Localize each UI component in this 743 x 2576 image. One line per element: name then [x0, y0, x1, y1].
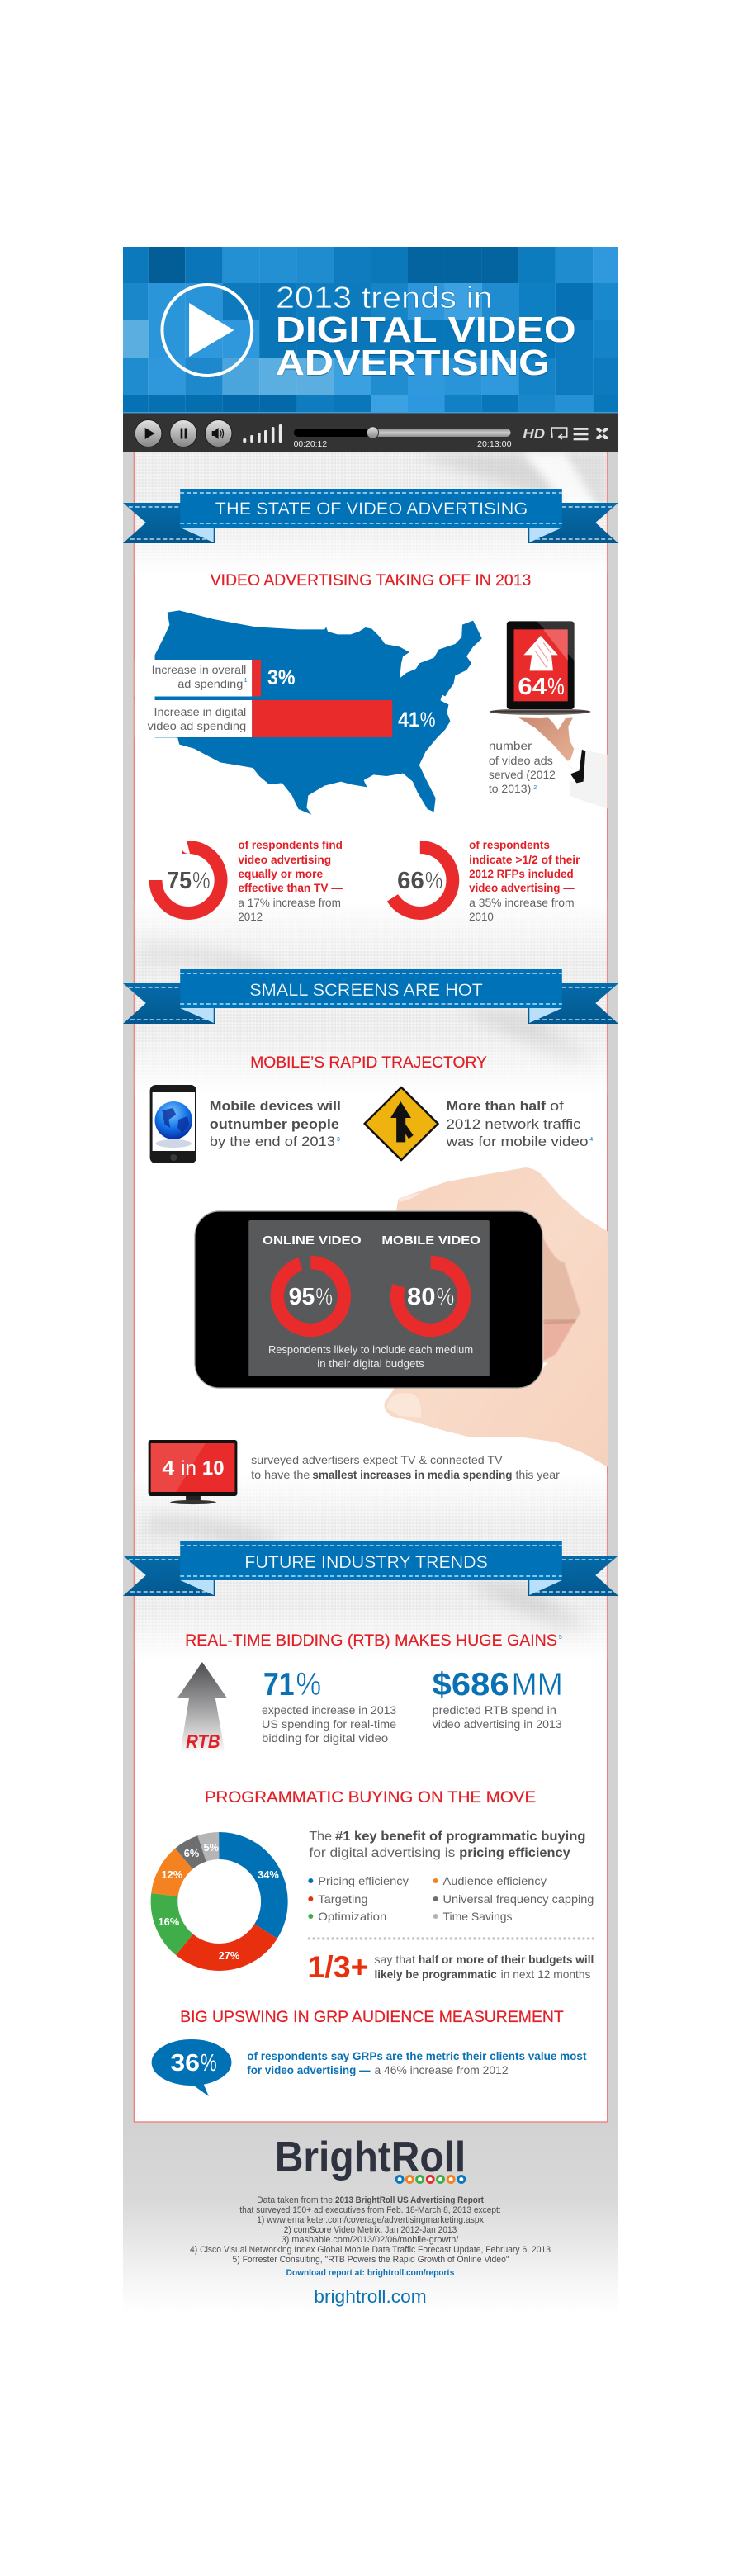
text: sources: 5) Forrester Consulting, "RTB Powers the Rapid Growth of Online Video" — [232, 2255, 509, 2265]
donut: 75 percent: % — [192, 868, 211, 894]
section ribbon: small screens are hot: SMALL SCREENS ARE HOT — [249, 981, 483, 1000]
text: sources — [190, 2195, 551, 2265]
text: number of video ads: served (2012 — [489, 768, 556, 781]
bar: overall ad spending: 1 — [244, 678, 248, 684]
heading: programmatic buying: PROGRAMMATIC BUYING ON THE MOVE — [205, 1789, 536, 1807]
section ribbon: future industry trends: FUTURE INDUSTRY TRENDS — [244, 1553, 488, 1572]
HD label: HD — [523, 425, 545, 442]
tablet value: % — [547, 674, 565, 700]
icon: tray and tablet — [490, 621, 590, 715]
icon: play circle — [162, 285, 252, 376]
title: ADVERTISING — [276, 343, 550, 383]
text: tv spending — [251, 1453, 560, 1481]
caption: Respondents likely to include each medium — [268, 1344, 473, 1356]
bar: overall ad spending — [135, 660, 296, 697]
legend: Pricing efficiency — [318, 1875, 409, 1887]
stat: 686 million: MM — [512, 1667, 563, 1702]
bar: digital video ad spending: 41 — [398, 709, 419, 732]
bar: digital video ad spending — [135, 700, 436, 737]
link: brightroll.com: brightroll.com — [314, 2286, 427, 2307]
speech bubble: 36 percent: % — [201, 2050, 217, 2076]
text: 75 percent description: of respondents find — [238, 838, 343, 851]
text: sources: 2013 BrightRoll US Advertising Report — [335, 2195, 484, 2205]
phone body — [195, 1211, 542, 1388]
text: number of video ads: to 2013) — [489, 782, 531, 795]
time labels: 00:20:12 — [294, 440, 327, 449]
stat: one third plus: in next 12 months — [501, 1968, 590, 1981]
section ribbon: the state of video advertising — [123, 489, 618, 543]
panel: white content card — [134, 452, 608, 2122]
donut: 95 percent: 95 — [289, 1284, 315, 1310]
stat: one third plus: half or more of their budgets will — [419, 1953, 594, 1966]
map: United States — [155, 610, 482, 815]
hero banner — [123, 247, 618, 413]
text: sources: Data taken from the — [257, 2195, 333, 2205]
donut: 80 percent: % — [437, 1284, 454, 1310]
icon: tv with 4 in 10: 10 — [202, 1457, 225, 1480]
text: GRPs: a 46% increase from 2012 — [374, 2063, 509, 2076]
heading: video advertising taking off: VIDEO ADVERTISING TAKING OFF IN 2013 — [211, 572, 531, 590]
text: network traffic: of — [550, 1098, 564, 1114]
donut: 75 percent — [156, 847, 221, 913]
text: 75 percent description: effective than TV — — [238, 881, 343, 894]
text: GRPs: of respondents say GRPs are the metric their clients value most — [247, 2049, 587, 2062]
background: cloth texture lower — [135, 1474, 607, 1660]
text: tv spending: smallest increases in media spending — [312, 1468, 513, 1481]
caption: in their digital budgets — [317, 1358, 424, 1370]
text: mobile devices: 3 — [337, 1137, 340, 1143]
background: cloth texture top — [135, 452, 607, 574]
donut: 80 percent: 80 — [407, 1284, 436, 1310]
donut chart: programmatic benefits: 12% — [161, 1868, 183, 1881]
phone screen — [248, 1220, 490, 1376]
speech bubble: 36 percent — [152, 2039, 231, 2096]
text: key benefit — [309, 1830, 585, 1860]
label: mobile video: MOBILE VIDEO — [381, 1234, 480, 1248]
text: key benefit: for digital advertising is — [309, 1846, 455, 1860]
icon: RTB arrow: RTB — [186, 1731, 220, 1752]
icon: hand — [384, 1167, 608, 1467]
text: key benefit: #1 key benefit of programmatic buying — [335, 1830, 585, 1844]
stat: 71 percent: bidding for digital video — [262, 1731, 389, 1745]
donut chart: programmatic benefits: 16% — [159, 1915, 180, 1928]
text: network traffic: 4 — [589, 1137, 593, 1143]
stat: 71 percent: US spending for real-time — [262, 1717, 396, 1731]
text: sources: 3) mashable.com/2013/02/06/mobile-growth/ — [282, 2235, 459, 2245]
text: sources: 4) Cisco Visual Networking Index Global Mobile Data Traffic Forecast Update, February 6, 2013 — [190, 2245, 551, 2255]
text: sources: 1) www.emarketer.com/coverage/advertisingmarketing.aspx — [257, 2215, 484, 2225]
donut chart: programmatic benefits: 34% — [258, 1868, 279, 1881]
section ribbon: future industry trends — [123, 1541, 618, 1596]
text: network traffic: More than half — [446, 1098, 546, 1114]
stat: 686 million — [433, 1667, 563, 1731]
heading: mobile's rapid trajectory: MOBILE’S RAPID TRAJECTORY — [250, 1054, 487, 1072]
text: 75 percent description: video advertising — [238, 853, 331, 866]
donut: 95 percent — [277, 1262, 344, 1330]
icon: loop — [551, 428, 567, 439]
icon: pause button — [170, 419, 196, 447]
donut chart: programmatic benefits: 6% — [184, 1847, 200, 1859]
icon: menu — [574, 428, 588, 440]
video player control bar — [123, 412, 618, 452]
background: cloth texture middle — [135, 900, 607, 1095]
stat: one third plus — [307, 1950, 594, 1984]
text: sources: that surveyed 150+ ad executives from Feb. 18-March 8, 2013 except: — [239, 2205, 501, 2215]
section ribbon: small screens are hot — [123, 969, 618, 1024]
icon: fullscreen — [596, 428, 608, 439]
stat: 71 percent — [262, 1667, 396, 1745]
legend: Optimization — [318, 1911, 386, 1923]
title: 2013 trends in — [276, 281, 493, 315]
text: mobile devices: Mobile devices will — [210, 1098, 341, 1114]
donut chart: programmatic benefits: 27% — [219, 1949, 240, 1962]
legend: Targeting — [318, 1893, 368, 1906]
heading: real-time bidding: 5 — [559, 1635, 562, 1641]
icon: waiter hand and sleeve — [518, 717, 608, 808]
stat: 686 million: video advertising in 2013 — [433, 1717, 562, 1731]
bar: overall ad spending: Increase in overall — [152, 663, 246, 676]
bar: overall ad spending: 3% — [267, 667, 296, 689]
legend: Audience efficiency — [442, 1875, 547, 1887]
waiter serving tablet — [490, 621, 608, 808]
text: 75 percent description: a 17% increase from — [238, 896, 341, 909]
text: tv spending: surveyed advertisers expect TV & connected TV — [251, 1453, 503, 1466]
bar: digital video ad spending: video ad spending — [148, 719, 246, 732]
icon: play button — [135, 419, 162, 447]
title: DIGITAL VIDEO — [276, 310, 576, 350]
text: 75 percent description — [238, 838, 343, 923]
text: number of video ads: of video ads — [489, 754, 553, 767]
icon: merge road sign — [365, 1087, 438, 1160]
text: tv spending: this year — [515, 1468, 560, 1481]
legend — [308, 1875, 594, 1923]
bar: digital video ad spending: % — [420, 709, 436, 732]
icon: tv with 4 in 10 — [149, 1440, 237, 1504]
text: number of video ads: 2 — [533, 785, 537, 791]
stat: 71 percent: % — [296, 1667, 321, 1702]
text: 66 percent description: video advertising — — [469, 881, 575, 894]
label: online video: ONLINE VIDEO — [263, 1234, 362, 1248]
text: tv spending: to have the — [251, 1468, 310, 1481]
grey side columns — [123, 452, 618, 2313]
time labels: 20:13:00 — [477, 440, 512, 449]
icon: tv with 4 in 10: in — [181, 1457, 196, 1480]
text: sources: 2) comScore Video Metrix, Jan 2012-Jan 2013 — [284, 2225, 457, 2235]
donut chart: programmatic benefits — [159, 1841, 279, 1962]
pixel mosaic background — [123, 247, 618, 413]
stat: 686 million: $686 — [433, 1667, 509, 1702]
stat: one third plus: 1/3+ — [307, 1950, 369, 1984]
text: key benefit: pricing efficiency — [459, 1846, 570, 1860]
donut: 66 percent: 66 — [397, 868, 424, 894]
heading: GRP audience measurement: BIG UPSWING IN GRP AUDIENCE MEASUREMENT — [180, 2009, 564, 2026]
tablet value: 64 — [518, 674, 547, 700]
bar: overall ad spending: ad spending — [177, 677, 243, 690]
stat: one third plus: say that — [374, 1953, 415, 1966]
text: number of video ads — [489, 739, 556, 795]
legend: Universal frequency capping — [442, 1893, 594, 1906]
stat: 71 percent: expected increase in 2013 — [262, 1703, 396, 1717]
stat: one third plus: likely be programmatic — [374, 1968, 497, 1981]
text: 66 percent description: indicate >1/2 of their — [469, 853, 580, 866]
icon: signal bars — [243, 424, 282, 443]
title — [276, 281, 576, 383]
tablet value — [518, 674, 565, 700]
text: 75 percent description: equally or more — [238, 867, 323, 880]
text: mobile devices: by the end of 2013 — [210, 1134, 335, 1149]
text: 66 percent description: of respondents — [469, 838, 550, 851]
heading: real-time bidding: REAL-TIME BIDDING (RTB) MAKES HUGE GAINS — [185, 1632, 557, 1650]
time labels — [294, 440, 512, 449]
text: network traffic — [445, 1098, 593, 1149]
US map with spending bars — [135, 610, 482, 815]
donut chart: programmatic benefits: 5% — [203, 1841, 220, 1854]
infographic page — [123, 247, 618, 2313]
text: mobile devices: outnumber people — [210, 1116, 339, 1132]
text: 66 percent description: 2010 — [469, 910, 494, 923]
text: 66 percent description: 2012 RFPs included — [469, 867, 574, 880]
text: 75 percent description: 2012 — [238, 910, 263, 923]
hand holding phone — [195, 1167, 608, 1467]
donut: 80 percent — [397, 1262, 464, 1330]
logo: BrightRoll: BrightRoll — [275, 2133, 466, 2181]
text: 66 percent description — [469, 838, 580, 923]
text: number of video ads: number — [489, 739, 532, 752]
icon: tv with 4 in 10: 4 — [162, 1457, 175, 1480]
text: GRPs: for video advertising — — [247, 2063, 371, 2076]
text: 66 percent description: a 35% increase from — [469, 896, 575, 909]
text: network traffic: was for mobile video — [445, 1134, 588, 1149]
stat: 686 million: predicted RTB spend in — [433, 1703, 556, 1717]
caption — [268, 1344, 473, 1370]
progress bar — [294, 427, 511, 438]
donut: 66 percent — [387, 847, 452, 913]
speech bubble: 36 percent: 36 — [170, 2050, 200, 2076]
text: network traffic: 2012 network traffic — [446, 1116, 581, 1132]
donut: 66 percent: % — [425, 868, 442, 894]
icon: volume button — [205, 419, 232, 447]
bar: digital video ad spending: Increase in digital — [154, 705, 246, 718]
donut: 95 percent: % — [315, 1284, 333, 1310]
donut: 75 percent: 75 — [167, 868, 192, 894]
text: mobile devices — [210, 1098, 341, 1149]
link: download report: Download report at: brightroll.com/reports — [286, 2268, 454, 2278]
text: GRPs — [247, 2049, 587, 2076]
section ribbon: the state of video advertising: THE STATE OF VIDEO ADVERTISING — [215, 500, 528, 519]
stat: 71 percent: 71 — [263, 1667, 295, 1702]
legend: Time Savings — [442, 1911, 513, 1923]
text: key benefit: The — [309, 1830, 332, 1844]
icon: smartphone with globe — [150, 1085, 196, 1163]
icon: RTB arrow — [177, 1662, 227, 1754]
